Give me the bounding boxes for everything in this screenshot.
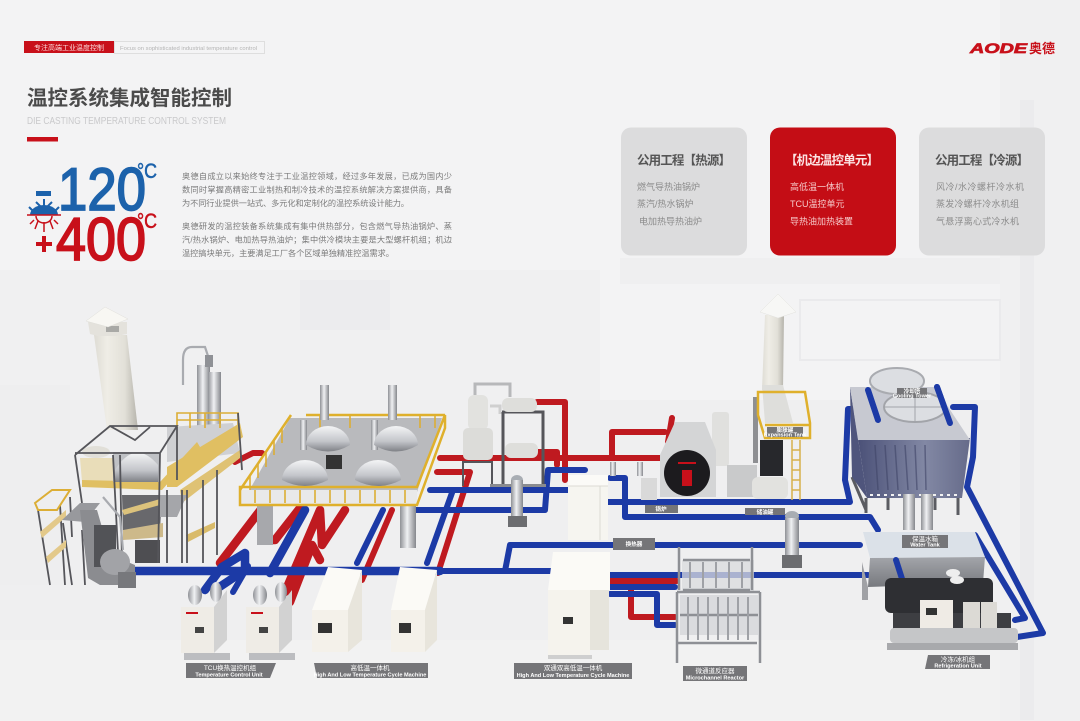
panel: machine-side unit: 【机边温控单元】 bbox=[785, 152, 879, 168]
header tag bbox=[24, 41, 264, 54]
gas boiler bbox=[610, 412, 788, 500]
header tag: 专注高端工业温度控制 bbox=[34, 43, 104, 52]
temperature range: 400 bbox=[56, 206, 146, 273]
intro text: 奥德自成立以来始终专注于工业温控领域，经过多年发展，已成为国内少 bbox=[182, 171, 452, 181]
intro text: 奥德研发的温控装备系统集成有集中供热部分，包含燃气导热油锅炉、蒸 bbox=[182, 221, 452, 231]
label: microchannel reactor: 微通道反应器 bbox=[696, 666, 735, 675]
chiller bbox=[885, 569, 1018, 650]
label: high and low temperature machine: High And Low Temperature Cycle Machine bbox=[314, 672, 426, 678]
label: stack platform: 膨胀罐 bbox=[777, 426, 794, 434]
reactor platform bbox=[240, 385, 445, 548]
panel: machine-side unit: 导热油加热装置 bbox=[790, 216, 853, 226]
panel: cold source bbox=[919, 128, 1045, 256]
icon: snowflake and sun bbox=[27, 199, 61, 232]
label: water tank: 保温水箱 bbox=[912, 534, 938, 543]
label: refrigeration unit: Refrigeration Unit bbox=[934, 664, 982, 670]
label: boiler: 锅炉 bbox=[655, 505, 667, 513]
left plant: chimney bbox=[86, 307, 138, 430]
intro text: 汽/热水锅炉、电加热导热油炉；集中供冷模块主要是大型螺杆机组；机边 bbox=[182, 234, 452, 244]
panel: cold source: 气悬浮离心式冷水机 bbox=[936, 216, 1019, 226]
label: water tank bbox=[902, 534, 948, 548]
vessels and condenser bbox=[462, 384, 546, 487]
panel: cold source: 公用工程【冷源】 bbox=[935, 152, 1029, 168]
label: sectional machine: High And Low Temperature Cycle Machine bbox=[517, 673, 629, 679]
intro text: 为不同行业提供一站式、多元化和定制化的温控系统设计能力。 bbox=[182, 198, 409, 208]
label: stack platform bbox=[764, 426, 807, 438]
label: cabinet: 换热器 bbox=[626, 540, 643, 548]
label: TCU: TCU换热温控机组 bbox=[204, 663, 257, 672]
label: microchannel reactor: Microchannel Reactor bbox=[686, 676, 745, 682]
temperature range bbox=[27, 156, 157, 273]
panel: heat source: 电加热导热油炉 bbox=[639, 216, 702, 226]
title bbox=[27, 86, 232, 142]
intro text bbox=[182, 171, 452, 258]
water tank with pumps bbox=[862, 494, 985, 600]
panel: heat source: 蒸汽/热水锅炉 bbox=[637, 198, 694, 209]
panel: heat source bbox=[621, 128, 747, 256]
panel: cold source: 蒸发冷螺杆冷水机组 bbox=[936, 198, 1019, 209]
label: cooling tower bbox=[893, 387, 932, 400]
label: cooling tower: 冷却塔 bbox=[904, 387, 921, 395]
pipes: blue cold lines bbox=[135, 387, 1043, 637]
TCU units bbox=[181, 582, 295, 660]
panel: heat source: 公用工程【热源】 bbox=[637, 152, 731, 168]
panel: machine-side unit: TCU温控单元 bbox=[790, 198, 844, 209]
label: cooling tower: Cooling Tower bbox=[893, 394, 932, 400]
cooling tower bbox=[850, 368, 970, 515]
right pump bbox=[782, 511, 802, 568]
logo: AODE: 奥德 bbox=[1029, 41, 1055, 56]
left plant: distillation columns bbox=[183, 347, 221, 432]
title: 温控系统集成智能控制 bbox=[27, 86, 232, 110]
left plant: grey mixer unit bbox=[80, 497, 136, 588]
temperature range: °C bbox=[137, 210, 157, 233]
label: sectional machine bbox=[514, 663, 632, 679]
label: high and low temperature machine bbox=[314, 663, 428, 678]
logo: AODE bbox=[969, 40, 1055, 56]
label: cabinet bbox=[613, 538, 655, 550]
label: refrigeration unit: 冷冻/冰机组 bbox=[941, 654, 976, 664]
label: sectional machine: 双通双高低温一体机 bbox=[544, 663, 603, 672]
panel: cold source: 风冷/水冷螺杆冷水机 bbox=[936, 181, 1024, 192]
title: DIE CASTING TEMPERATURE CONTROL SYSTEM bbox=[27, 115, 226, 127]
header tag: Focus on sophisticated industrial temperature control bbox=[120, 46, 257, 52]
label: refrigeration unit bbox=[925, 654, 990, 670]
reactors bbox=[282, 385, 418, 486]
intro text: 温控搞块单元，主要满足工厂各个区域单独精准控温需求。 bbox=[182, 248, 394, 258]
cabinet bbox=[568, 475, 608, 540]
label: TCU bbox=[186, 663, 276, 678]
label: TCU: Temperature Control Unit bbox=[195, 672, 263, 678]
exhaust stack and yellow platform bbox=[753, 294, 810, 500]
label: high and low temperature machine: 高低温一体机 bbox=[350, 663, 390, 672]
logo: AODE: AODE bbox=[969, 40, 1028, 56]
panel: heat source: 燃气导热油锅炉 bbox=[637, 181, 700, 192]
label: boiler bbox=[645, 505, 678, 513]
temperature range: 120 bbox=[58, 156, 146, 223]
temperature range: °C bbox=[137, 160, 157, 183]
label: stack platform: Expansion Tank bbox=[764, 432, 807, 438]
microchannel reactor bbox=[677, 547, 760, 663]
intro text: 数同时掌握高精密工业制热和制冷技术的温控系统解决方案提供商，具备 bbox=[182, 184, 452, 194]
pipes: red hot lines bbox=[220, 402, 677, 617]
label: microchannel reactor bbox=[683, 666, 747, 682]
label: expansion bbox=[745, 508, 785, 516]
large temperature cycle machine bbox=[548, 552, 610, 659]
left plant: steel frames bbox=[75, 413, 243, 563]
label: water tank: Water Tank bbox=[910, 542, 941, 548]
label: expansion: 储油罐 bbox=[757, 508, 774, 516]
panel: machine-side unit: 高低温一体机 bbox=[790, 181, 844, 192]
left plant: small rack bbox=[35, 490, 100, 585]
panel: machine-side unit bbox=[770, 128, 896, 256]
high and low temperature machines bbox=[312, 567, 437, 652]
central pump bbox=[508, 475, 527, 527]
